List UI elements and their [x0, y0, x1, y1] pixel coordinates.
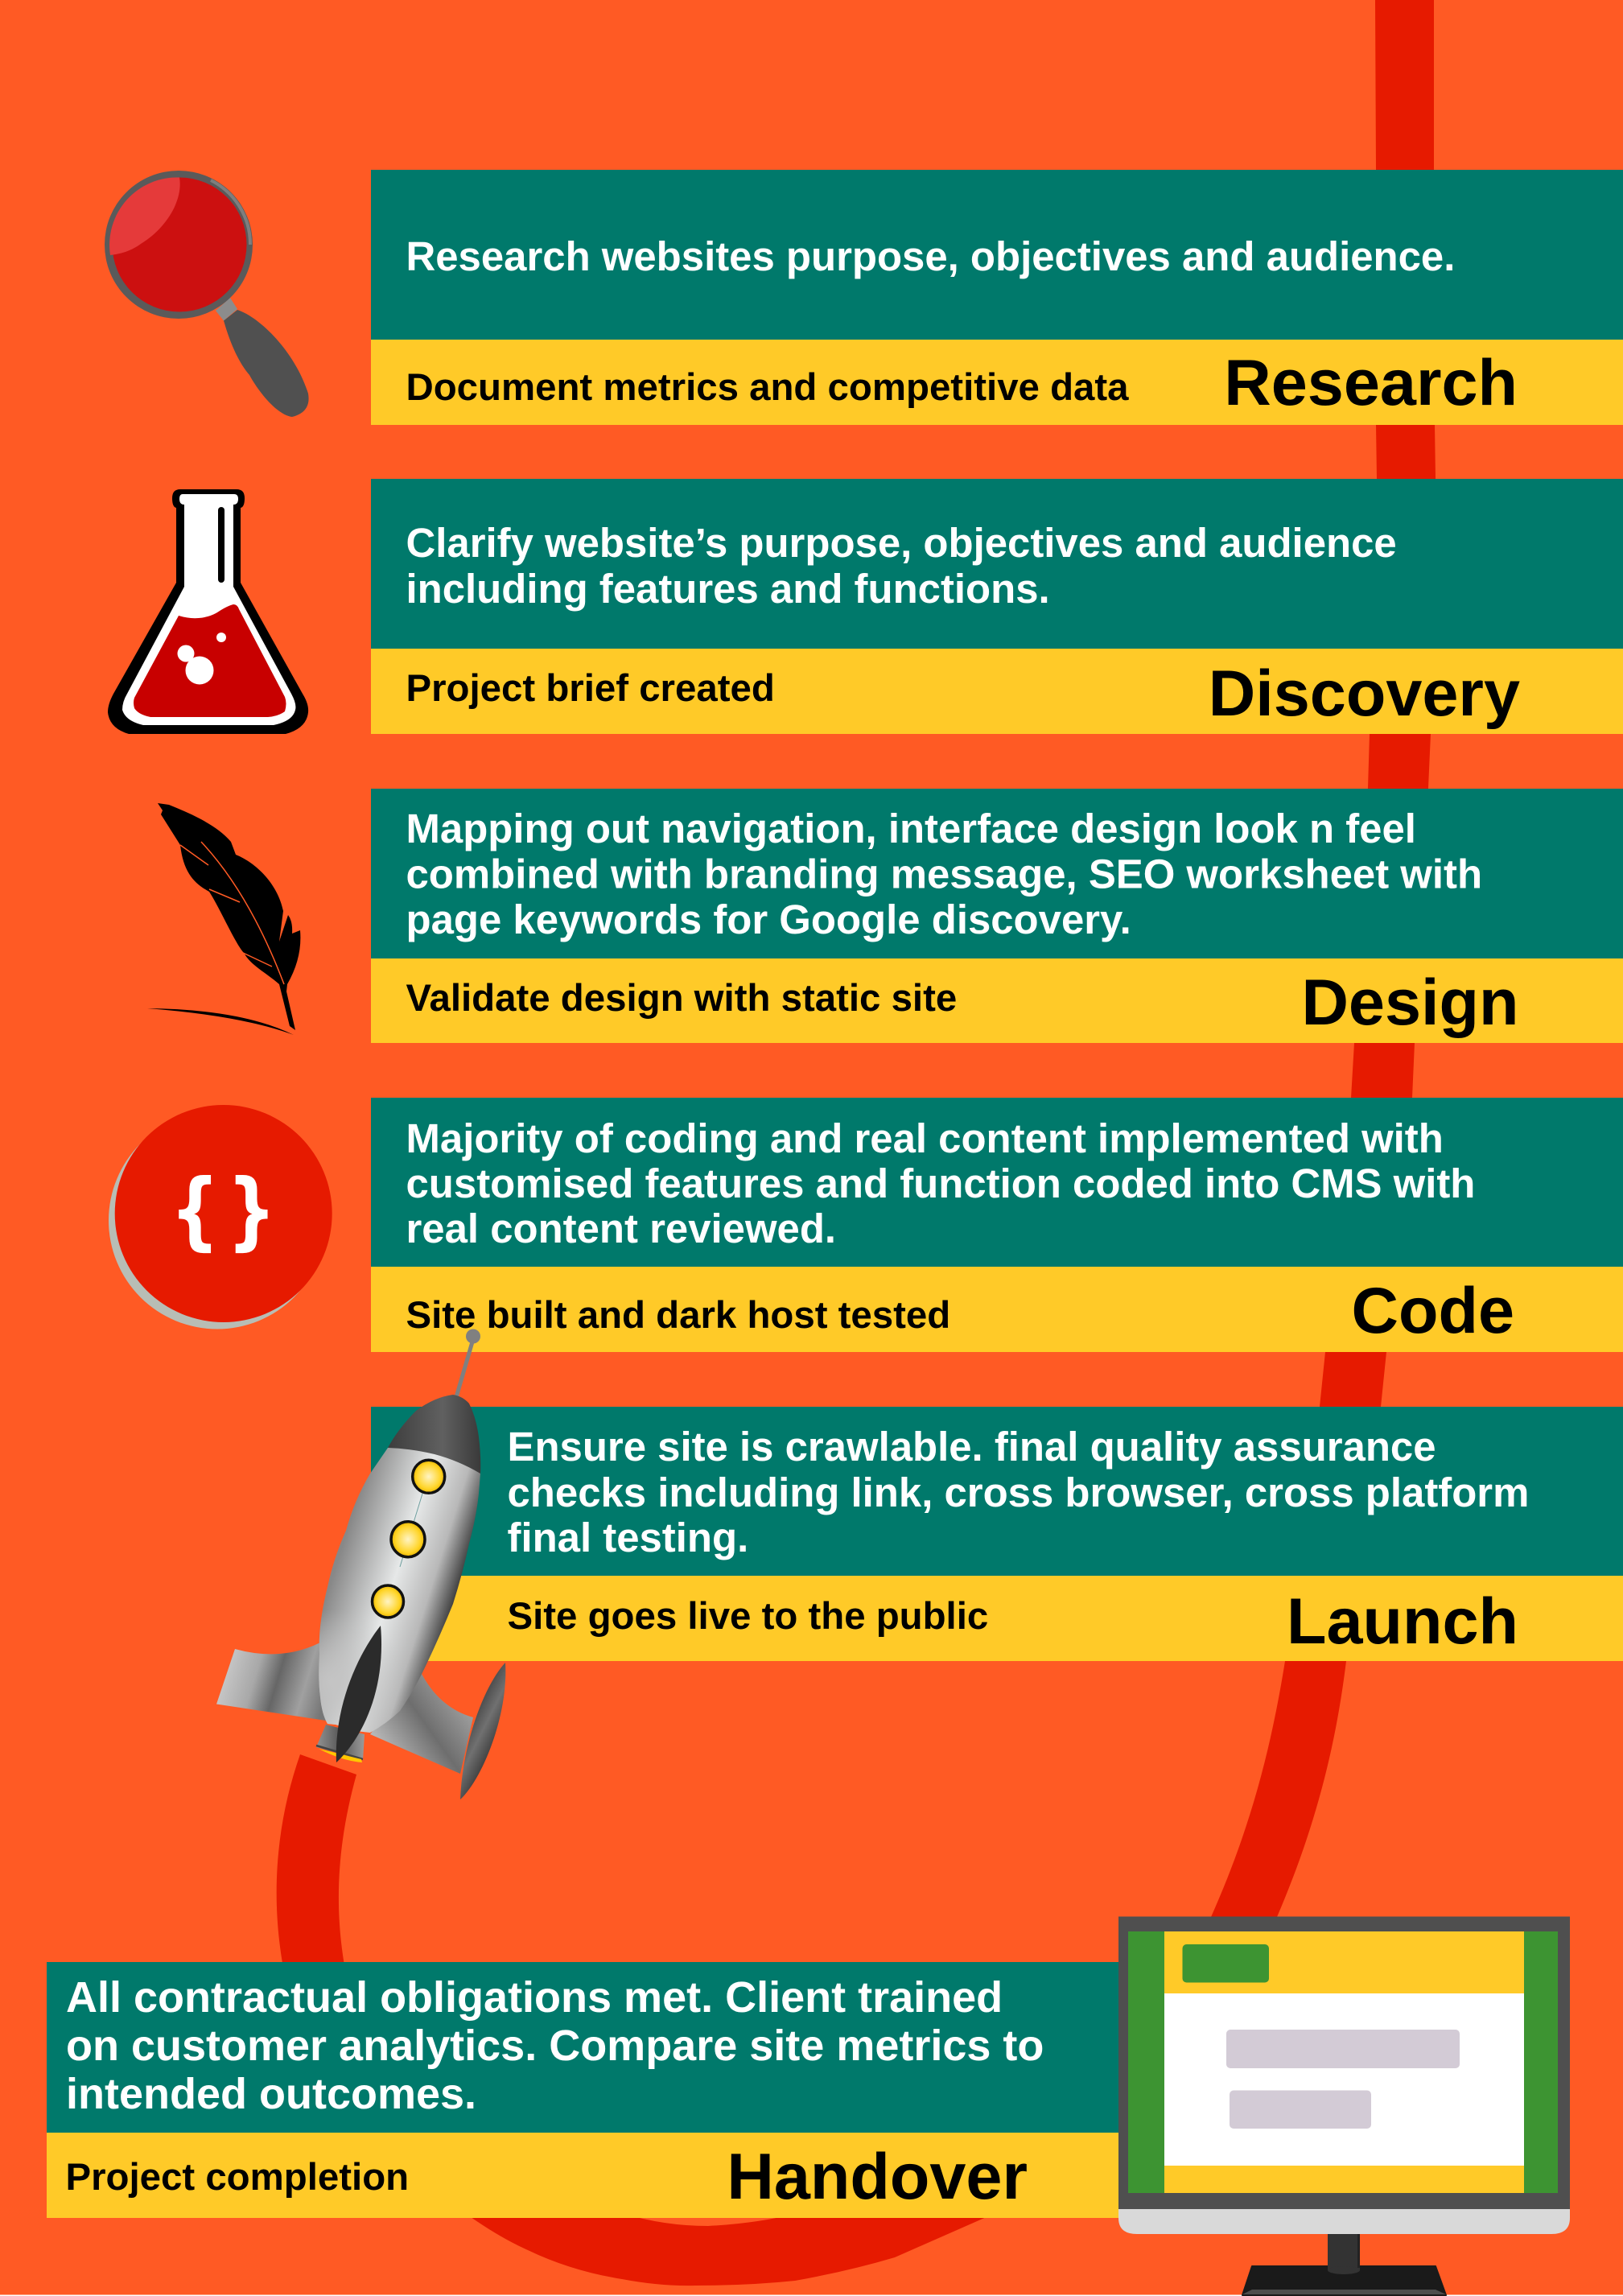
- code description band: [371, 1098, 1623, 1267]
- launch description: checks including link, cross browser, cross platform: [507, 1470, 1529, 1515]
- handover description: intended outcomes.: [66, 2070, 476, 2118]
- timeline path: right descending band: [1127, 0, 1436, 2092]
- panel: Research: [371, 170, 1623, 425]
- launch outcome band: [371, 1576, 1623, 1661]
- rocket antenna: [456, 1329, 480, 1397]
- icon: chemistry flask: [108, 489, 308, 734]
- code description: customised features and function coded into CMS with: [406, 1160, 1475, 1206]
- launch outcome: Site goes live to the public: [507, 1595, 988, 1638]
- research description band: [371, 170, 1623, 340]
- handover description: on customer analytics. Compare site metrics to: [66, 2022, 1044, 2070]
- discovery description band: [371, 479, 1623, 649]
- rocket body: [319, 1395, 481, 1733]
- panel: Launch: [371, 1407, 1623, 1661]
- handover description band: [47, 1962, 1118, 2133]
- icon: quill feather: [147, 803, 300, 1035]
- handover heading: Handover: [727, 2141, 1028, 2213]
- screen text block 1: [1226, 2030, 1460, 2068]
- handover outcome: Project completion: [66, 2156, 409, 2199]
- monitor bezel: [1118, 1917, 1570, 2209]
- panel: Design: [371, 789, 1623, 1043]
- screen text block 2: [1230, 2091, 1371, 2129]
- launch description band: [371, 1407, 1623, 1576]
- icon: code braces: [109, 1105, 332, 1329]
- code description: Majority of coding and real content implemented with: [406, 1115, 1444, 1161]
- handover description: All contractual obligations met. Client trained: [66, 1973, 1003, 2022]
- monitor chin: [1118, 2209, 1570, 2234]
- design description band: [371, 789, 1623, 958]
- discovery outcome band: [371, 649, 1623, 734]
- design description: combined with branding message, SEO worksheet with: [406, 851, 1482, 897]
- rocket nozzle: [316, 1725, 365, 1762]
- icon: code braces: }: [227, 1161, 276, 1259]
- rocket wings: [216, 1643, 505, 1799]
- screen header and footer: [1164, 1931, 1524, 2193]
- launch description: final testing.: [507, 1515, 748, 1560]
- design description: Mapping out navigation, interface design look n feel: [406, 806, 1416, 851]
- code description: real content reviewed.: [406, 1206, 836, 1251]
- research description: Research websites purpose, objectives and audience.: [406, 233, 1455, 279]
- launch description: Ensure site is crawlable. final quality assurance: [507, 1424, 1436, 1470]
- code heading: Code: [1352, 1275, 1514, 1347]
- design heading: Design: [1301, 967, 1519, 1039]
- research heading: Research: [1224, 347, 1518, 419]
- screen logo block: [1183, 1944, 1269, 1983]
- discovery outcome: Project brief created: [406, 667, 775, 710]
- icon: code braces: {: [171, 1161, 220, 1259]
- timeline path: bottom curve: [386, 2133, 1127, 2286]
- design outcome: Validate design with static site: [406, 977, 957, 1020]
- discovery description: including features and functions.: [406, 566, 1050, 612]
- discovery description: Clarify website’s purpose, objectives and audience: [406, 520, 1397, 566]
- icon: desktop monitor: [1118, 1917, 1570, 2295]
- icon: rocket: [216, 1329, 505, 1799]
- panel: Code: [371, 1098, 1623, 1352]
- rocket windows: [372, 1460, 445, 1618]
- research outcome: Document metrics and competitive data: [406, 366, 1129, 409]
- design description: page keywords for Google discovery.: [406, 897, 1131, 942]
- launch heading: Launch: [1287, 1585, 1518, 1658]
- discovery heading: Discovery: [1209, 657, 1520, 730]
- code outcome: Site built and dark host tested: [406, 1294, 950, 1337]
- icon: magnifying glass: [105, 171, 309, 417]
- panel: Discovery: [371, 479, 1623, 734]
- research outcome band: [371, 340, 1623, 425]
- timeline path: left rising band: [277, 1754, 563, 2173]
- code outcome band: [371, 1267, 1623, 1352]
- screen side bars: [1128, 1931, 1558, 2193]
- design outcome band: [371, 958, 1623, 1043]
- screen content area: [1164, 1993, 1524, 2166]
- rocket centre fin: [336, 1626, 381, 1762]
- panel: Handover: [47, 1962, 1118, 2218]
- monitor stand: [1242, 2234, 1446, 2295]
- handover outcome band: [47, 2133, 1118, 2218]
